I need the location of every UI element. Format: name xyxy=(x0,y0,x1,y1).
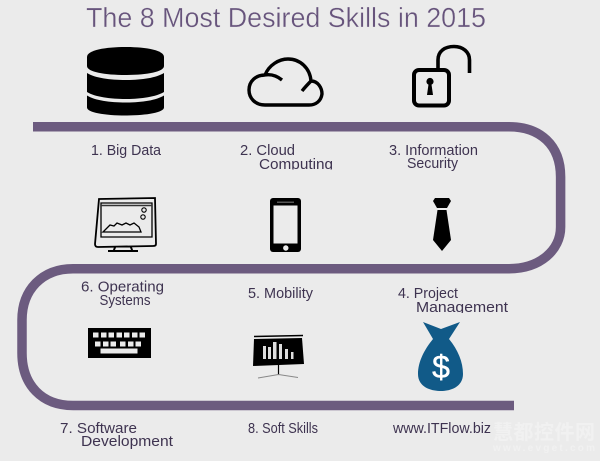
label: big data: 1. Big Data xyxy=(91,142,162,159)
icon: monitor xyxy=(95,198,156,252)
label: software development xyxy=(60,420,174,450)
watermark: 慧都控件网 xyxy=(493,421,595,444)
icon: keyboard xyxy=(88,328,151,358)
label: soft skills: 8. Soft Skills xyxy=(248,420,318,437)
label: information security xyxy=(389,142,478,172)
label: project management: Management xyxy=(416,299,509,316)
icon: smartphone xyxy=(270,198,301,252)
icon: necktie xyxy=(433,198,451,251)
icon: money bag: $ xyxy=(432,349,450,385)
title: The 8 Most Desired Skills in 2015 xyxy=(86,2,486,33)
label: information security: 3. Information xyxy=(389,142,478,159)
label: cloud computing: 2. Cloud xyxy=(240,142,295,159)
label: information security: Security xyxy=(407,155,458,172)
label: project management: 4. Project xyxy=(398,285,459,302)
label: mobility: 5. Mobility xyxy=(248,285,313,302)
label: cloud computing: Computing xyxy=(259,156,333,173)
label: software development: 7. Software xyxy=(60,420,137,437)
label: cloud computing xyxy=(240,144,332,170)
icon: presentation board xyxy=(253,336,304,378)
icon: database xyxy=(87,47,164,116)
label: software development: Development xyxy=(81,433,174,450)
winding path band xyxy=(22,127,561,405)
label: operating systems xyxy=(81,278,164,309)
label: website: www.ITFlow.biz xyxy=(392,420,491,437)
icon: money bag xyxy=(418,322,463,391)
label: operating systems: Systems xyxy=(100,292,150,309)
icon: open padlock xyxy=(414,46,470,106)
watermark xyxy=(492,421,595,454)
icon: cloud xyxy=(249,59,322,105)
label: operating systems: 6. Operating xyxy=(81,278,164,296)
watermark: www.evget.com xyxy=(492,443,595,454)
label: project management xyxy=(398,287,508,313)
